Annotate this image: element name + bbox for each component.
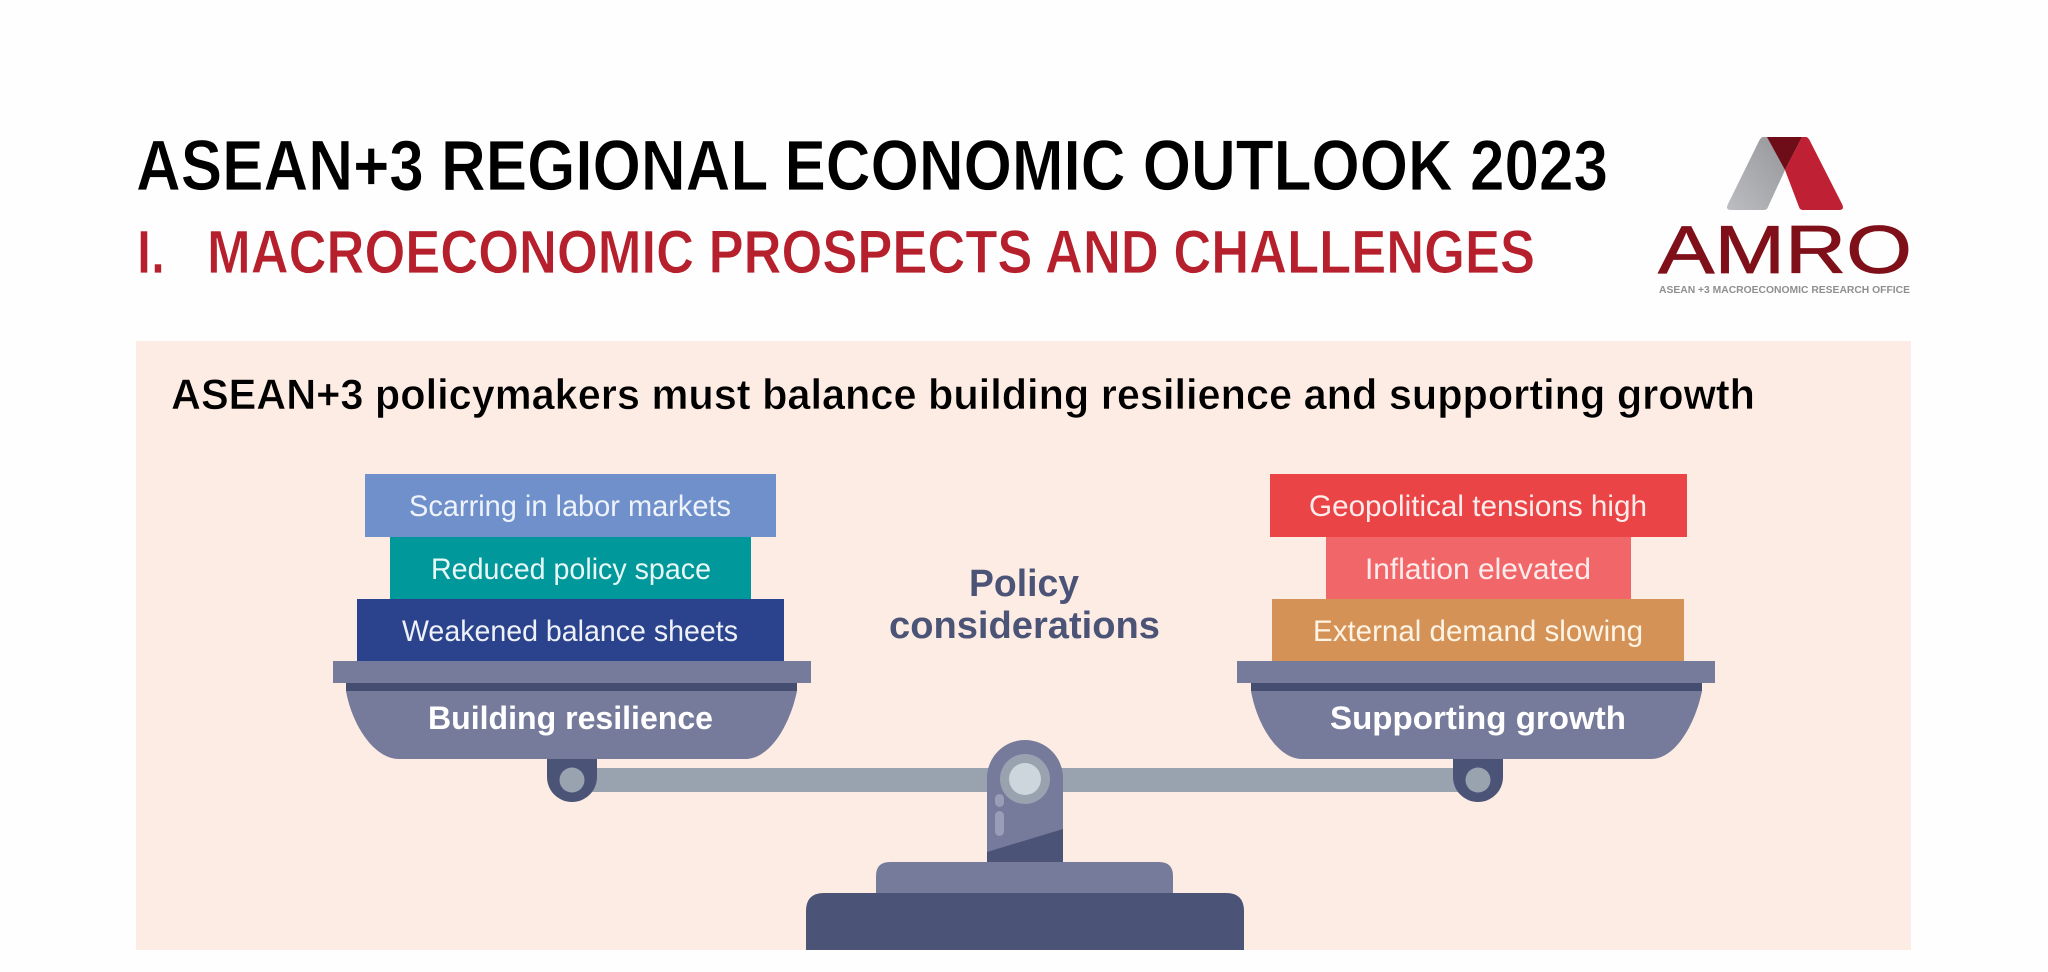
block: external demand slowing (1272, 599, 1684, 661)
logo tagline: ASEAN +3 MACROECONOMIC RESEARCH OFFICE (1659, 284, 1910, 296)
title: ASEAN+3 REGIONAL ECONOMIC OUTLOOK 2023 (136, 127, 1608, 206)
center label: policy considerations: considerations (889, 605, 1160, 647)
logo wordmark: AMRO (1658, 212, 1912, 288)
subtitle: MACROECONOMIC PROSPECTS AND CHALLENGES (207, 218, 1535, 286)
right pan: supporting growth (1237, 474, 1715, 759)
right pan label: Supporting growth (1330, 700, 1626, 736)
scale beam (590, 768, 1460, 792)
subtitle: I. (137, 218, 165, 286)
left hanger (547, 759, 597, 802)
block: reduced policy space (390, 537, 751, 599)
logo mark (1727, 137, 1843, 210)
logo: AMRO (1658, 137, 1912, 296)
block: inflation elevated: Inflation elevated (1365, 553, 1591, 586)
block: scarring in labor markets: Scarring in labor markets (409, 490, 731, 523)
block: reduced policy space: Reduced policy space (431, 553, 711, 586)
left pan label: Building resilience (428, 700, 713, 736)
scale base (806, 862, 1244, 950)
block: scarring in labor markets (365, 474, 776, 537)
scale pillar (987, 740, 1063, 862)
right pan bowl (1237, 661, 1715, 759)
panel: policy balance (136, 341, 1911, 950)
block: weakened balance sheets: Weakened balance sheets (402, 615, 738, 648)
block: geopolitical tensions high: Geopolitical tensions high (1309, 490, 1647, 523)
block: weakened balance sheets (357, 599, 784, 661)
left pan: building resilience (333, 474, 811, 759)
panel heading: ASEAN+3 policymakers must balance building resilience and supporting growth (171, 371, 1755, 419)
block: geopolitical tensions high (1270, 474, 1687, 537)
center label: policy considerations: Policy (969, 563, 1079, 605)
right hanger (1453, 759, 1503, 802)
left pan bowl (333, 661, 811, 759)
block: external demand slowing: External demand slowing (1313, 615, 1643, 648)
center label: policy considerations (889, 563, 1160, 647)
block: inflation elevated (1326, 537, 1631, 599)
